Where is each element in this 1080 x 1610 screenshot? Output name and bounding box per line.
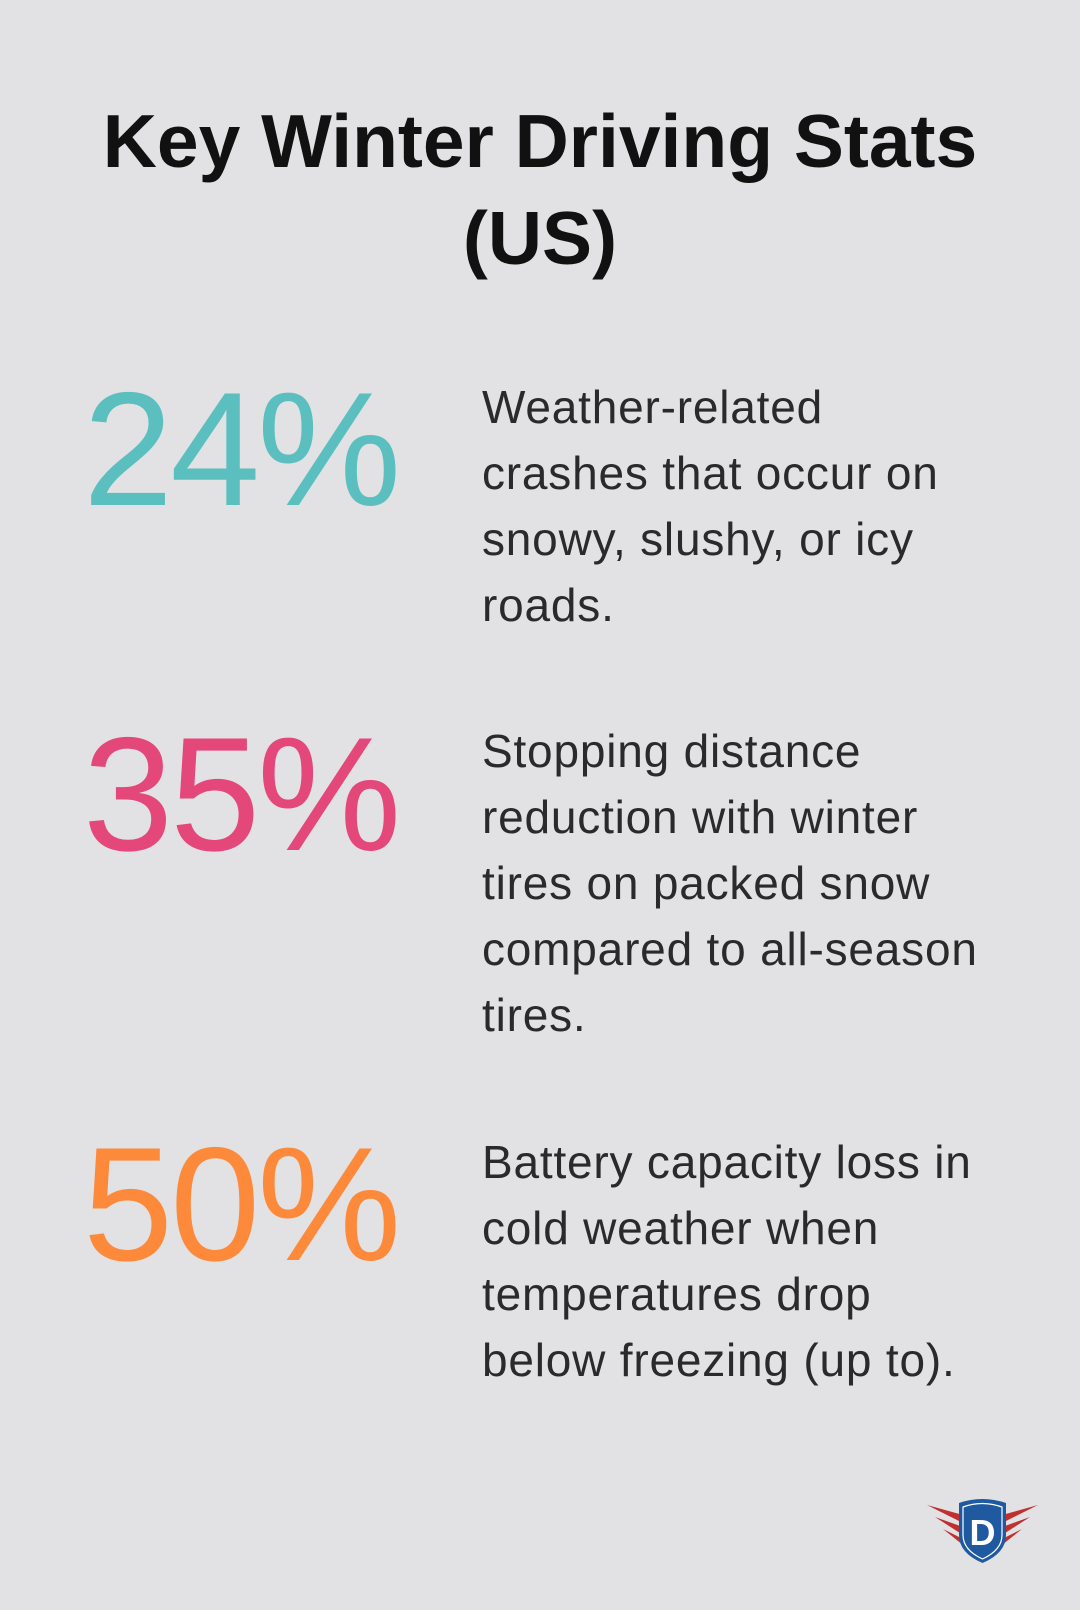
title: Key Winter Driving Stats: [103, 99, 977, 183]
stat 2 description: compared to all-season: [482, 923, 978, 975]
stat 1 number: 24%: [83, 359, 398, 540]
stat 1 description: snowy, slushy, or icy: [482, 513, 914, 565]
stat 1 description: [482, 381, 939, 631]
stat 3 description: [482, 1136, 972, 1386]
stat 2 description: tires on packed snow: [482, 857, 930, 909]
stat 1 description: Weather-related: [482, 381, 823, 433]
stat 2 description: Stopping distance: [482, 725, 861, 777]
stat 3 description: temperatures drop: [482, 1268, 871, 1320]
stat 2 description: [482, 725, 978, 1041]
stat 3 number: 50%: [83, 1114, 398, 1295]
stat 3 description: cold weather when: [482, 1202, 879, 1254]
icon: logo shield: D: [970, 1512, 996, 1553]
stat 2 number: 35%: [83, 704, 398, 885]
stat 3 description: below freezing (up to).: [482, 1334, 956, 1386]
title: [103, 99, 977, 280]
icon: logo shield: [927, 1499, 1038, 1563]
stat 2 description: tires.: [482, 989, 586, 1041]
stat 3 description: Battery capacity loss in: [482, 1136, 972, 1188]
stat 1 description: crashes that occur on: [482, 447, 939, 499]
stat 1 description: roads.: [482, 579, 615, 631]
stat 2 description: reduction with winter: [482, 791, 918, 843]
title: (US): [463, 196, 617, 280]
